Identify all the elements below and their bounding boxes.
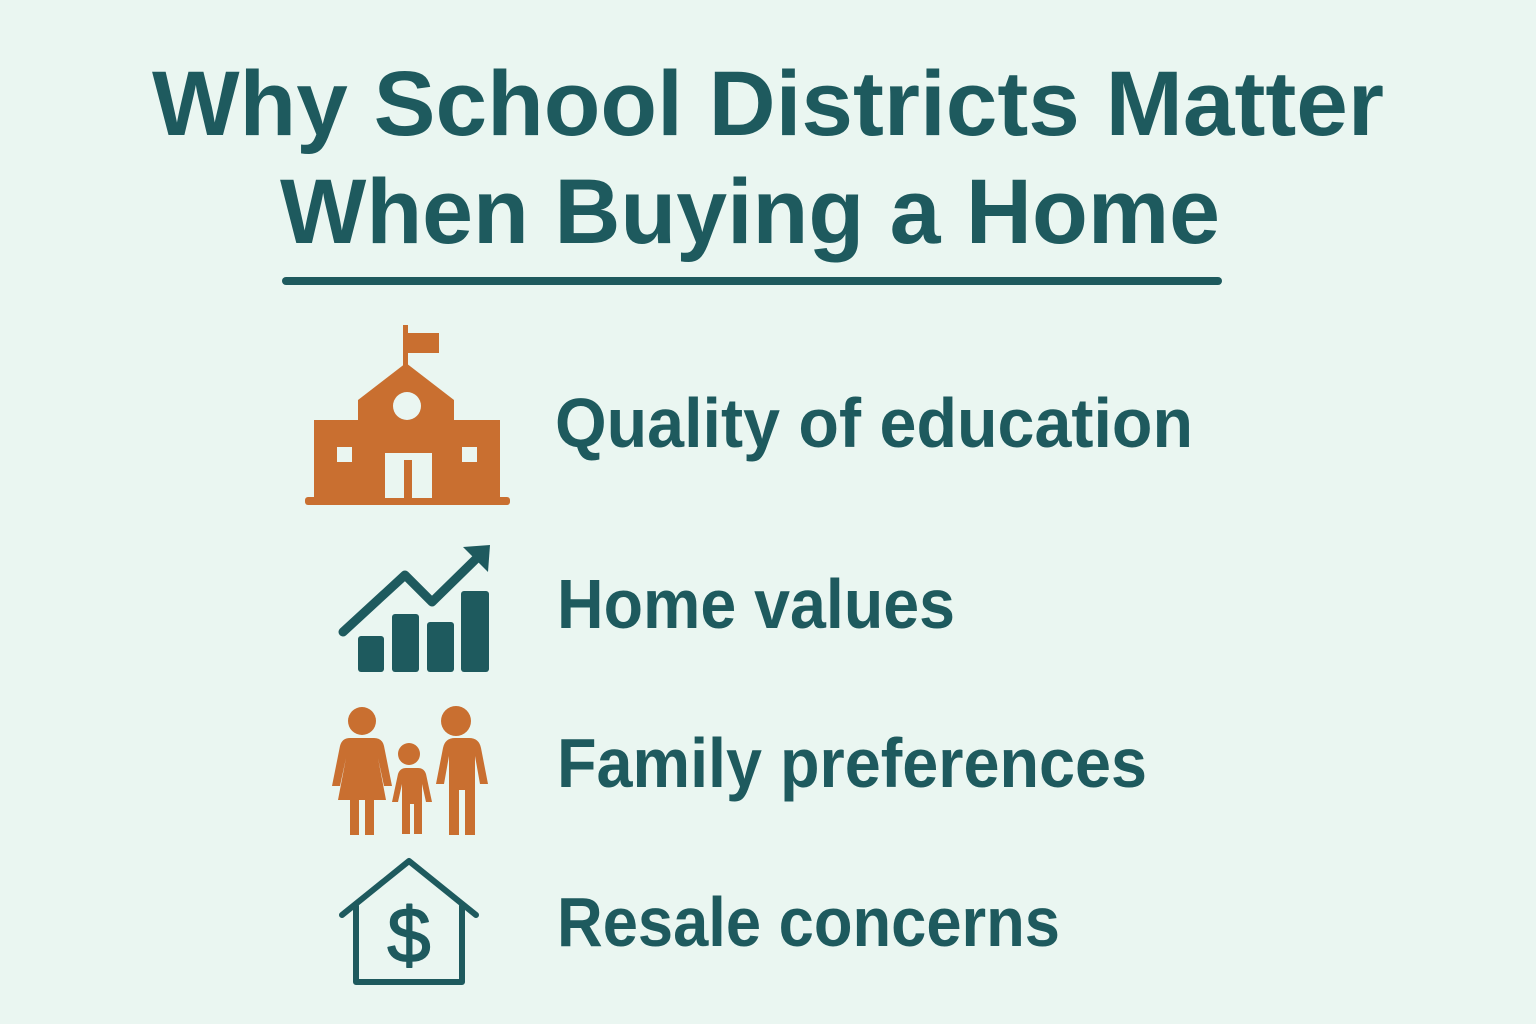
text: family: Family preferences	[557, 724, 1147, 802]
icon: school	[305, 325, 510, 505]
text: quality: Quality of education	[555, 384, 1193, 462]
icon: house dollar: $	[387, 891, 431, 979]
text: resale: Resale concerns	[557, 883, 1060, 961]
title: When Buying a Home	[280, 161, 1220, 263]
icon: house dollar	[342, 861, 476, 982]
title	[152, 53, 1384, 285]
title: Why School Districts Matter	[152, 53, 1384, 155]
icon: chart	[343, 545, 490, 672]
text: home values: Home values	[557, 565, 955, 643]
icon: family	[332, 706, 488, 835]
